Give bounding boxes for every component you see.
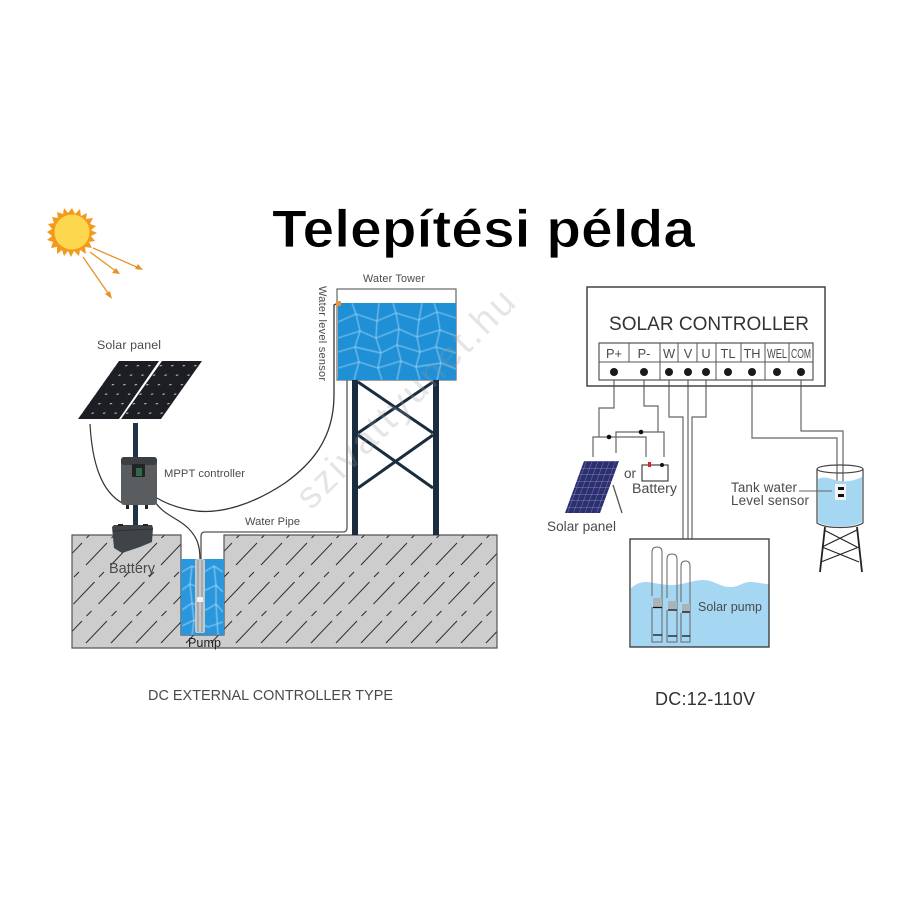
arrows: sun rays <box>83 248 143 299</box>
tank water <box>818 477 862 526</box>
junction dots <box>607 430 643 439</box>
terminal block: TL <box>721 346 735 361</box>
terminal block: P- <box>638 346 650 361</box>
terminal block <box>599 343 813 380</box>
controller heading: SOLAR CONTROLLER <box>609 314 809 335</box>
ground with well <box>72 535 497 648</box>
right diagram: solar controller wiring <box>547 287 863 709</box>
infographic: solar pump installation example <box>47 208 864 705</box>
icon: small battery <box>642 462 668 481</box>
icon: small solar panel <box>565 461 622 513</box>
label: solar panel: Solar panel <box>97 338 161 352</box>
sensor <box>835 484 846 500</box>
water tower <box>336 289 456 535</box>
label: solar panel: Solar panel <box>547 519 616 534</box>
icon: sun <box>47 208 97 257</box>
terminal block: COM <box>791 347 811 361</box>
sensor <box>336 301 341 306</box>
tower legs and braces <box>355 380 436 535</box>
controller box <box>587 287 825 386</box>
icon: pumps <box>652 547 690 642</box>
label: solar pump: Solar pump <box>698 600 762 614</box>
label: pump: Pump <box>188 636 221 650</box>
label: water level sensor: Water level sensor <box>316 286 328 381</box>
tank outline <box>817 469 863 528</box>
terminal block: W <box>663 346 676 361</box>
well water <box>181 559 224 635</box>
label: tank water level sensor: Level sensor <box>731 493 810 508</box>
label: water tower: Water Tower <box>363 273 425 285</box>
terminal block: V <box>684 346 693 361</box>
water tank with level sensor <box>817 465 863 572</box>
label: or: or <box>624 466 637 481</box>
pole <box>133 423 138 535</box>
icon: pump <box>195 559 205 633</box>
water pipe <box>201 380 347 560</box>
label: water pipe: Water Pipe <box>245 516 300 528</box>
tank <box>337 289 456 380</box>
pump box <box>630 539 769 647</box>
label: tank water level sensor: Tank water <box>731 480 798 495</box>
label: MPPT controller: MPPT controller <box>164 468 245 480</box>
icon: solar panel array <box>78 361 202 419</box>
terminal block: WEL <box>767 347 787 361</box>
terminal block: P+ <box>606 346 622 361</box>
watermark: szivattyunet.hu <box>288 281 524 517</box>
title: Telepítési példa <box>272 200 696 259</box>
caption: voltage: DC:12-110V <box>655 689 755 709</box>
label: battery: Battery <box>632 481 678 497</box>
left diagram: DC external controller type <box>47 208 497 704</box>
icon: MPPT controller <box>121 457 157 509</box>
label: battery: Battery <box>109 561 156 577</box>
tower <box>820 527 862 572</box>
tank water <box>338 303 456 380</box>
cables <box>90 303 338 560</box>
terminal block: U <box>701 346 711 361</box>
terminal block: TH <box>743 346 761 361</box>
wiring <box>593 372 843 539</box>
caption: DC external controller type: DC EXTERNAL CONTROLLER TYPE <box>148 688 393 704</box>
label: tank water level sensor <box>731 480 832 508</box>
icon: battery <box>112 524 153 553</box>
